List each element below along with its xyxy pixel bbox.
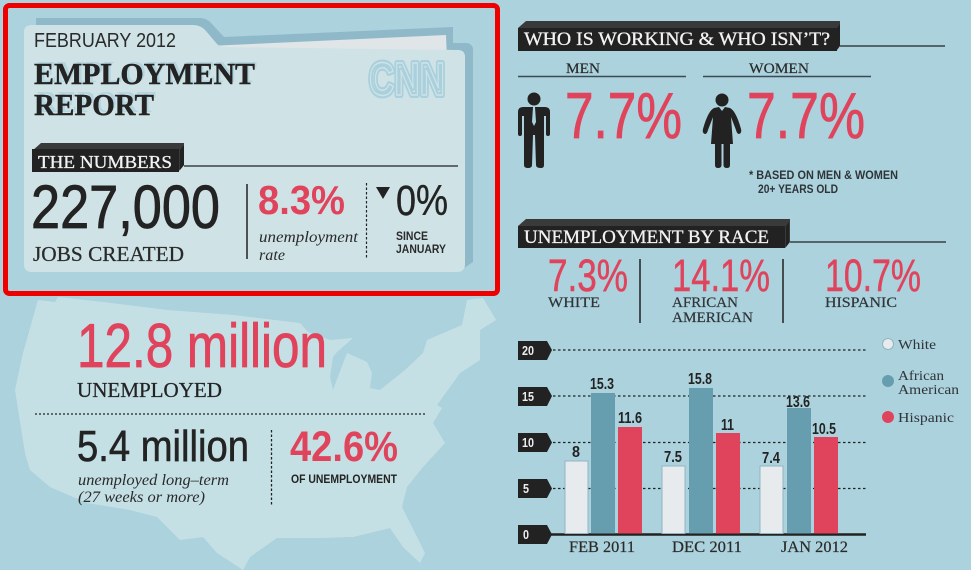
legend item: african american: African xyxy=(898,369,944,384)
since january xyxy=(396,231,446,256)
legend item: hispanic: Hispanic xyxy=(898,411,954,426)
since january: SINCE xyxy=(396,231,428,243)
icon: down triangle xyxy=(376,187,390,199)
long-term label xyxy=(78,472,229,506)
stat: hispanic: 10.7% xyxy=(825,250,921,301)
y axis values: 10 xyxy=(522,436,534,450)
y axis tags xyxy=(518,341,552,544)
folder front xyxy=(24,25,465,272)
long-term label: unemployed long–term xyxy=(78,472,229,489)
column label: women: WOMEN xyxy=(749,61,809,77)
title: EMPLOYMENT xyxy=(34,56,255,91)
category labels: FEB 2011 xyxy=(569,539,635,556)
footnote: 20+ YEARS OLD xyxy=(758,182,838,196)
date: FEBRUARY 2012 xyxy=(34,30,176,52)
paper sheet xyxy=(208,35,447,60)
stat: hispanic: HISPANIC xyxy=(825,295,897,311)
stat: white: WHITE xyxy=(548,295,600,311)
figure: 12.8 million: 12.8 million xyxy=(77,312,327,381)
bar values xyxy=(572,371,836,467)
panel: unemployed totals xyxy=(35,312,427,506)
unemployment rate label xyxy=(259,229,359,264)
stat: white: 7.3% xyxy=(548,250,628,301)
bar chart xyxy=(518,341,866,556)
title xyxy=(34,56,255,122)
heading: unemployment by race xyxy=(518,219,946,248)
logo: CNN: CNN xyxy=(369,53,445,105)
bar values: 7.5 xyxy=(664,449,682,466)
legend item: white: White xyxy=(898,338,936,353)
bar values: 8 xyxy=(572,444,580,461)
highlight border xyxy=(6,6,498,294)
y axis values: 0 xyxy=(523,528,529,542)
jobs figure: 227,000 xyxy=(31,173,220,241)
figure: men rate: 7.7% xyxy=(565,79,682,152)
stat: white xyxy=(548,250,628,311)
figure: women rate: 7.7% xyxy=(747,79,865,152)
icon: man xyxy=(518,92,550,168)
US map silhouette xyxy=(15,297,496,570)
bars: dec 2011 xyxy=(662,388,740,534)
since january: JANUARY xyxy=(396,244,446,256)
panel: unemployment by race xyxy=(518,219,946,326)
bar values: 15.8 xyxy=(688,371,712,388)
title shadow xyxy=(37,54,257,119)
bar values: 15.3 xyxy=(590,376,614,393)
logo: CNN: CNN xyxy=(369,53,445,105)
legend item: african american: American xyxy=(898,383,959,398)
heading: unemployment by race: UNEMPLOYMENT BY RACE xyxy=(524,227,769,248)
stat: african american: 14.1% xyxy=(672,250,770,301)
category labels xyxy=(569,539,848,556)
legend xyxy=(882,338,959,426)
bar values: 10.5 xyxy=(812,421,836,438)
heading: who is working: WHO IS WORKING & WHO ISN’T? xyxy=(524,29,830,50)
heading: the numbers xyxy=(32,143,458,172)
stat: african american: AMERICAN xyxy=(672,310,753,326)
unemployment rate figure: 8.3% xyxy=(258,177,345,223)
y axis values xyxy=(522,344,534,542)
footnote xyxy=(749,168,898,196)
footnote: * BASED ON MEN & WOMEN xyxy=(749,168,898,182)
icon: woman xyxy=(703,94,741,168)
long-term label: (27 weeks or more) xyxy=(78,489,205,506)
bars: feb 2011 xyxy=(565,393,642,534)
category labels: DEC 2011 xyxy=(672,539,742,556)
folder back xyxy=(36,18,473,268)
bar values: 11.6 xyxy=(618,410,642,427)
column label: men: MEN xyxy=(566,61,600,77)
label: of unemployment: OF UNEMPLOYMENT xyxy=(291,472,398,486)
change figure: 0% xyxy=(396,177,448,225)
stat: hispanic xyxy=(825,250,921,311)
heading: who is working xyxy=(518,21,945,51)
legend item: african american xyxy=(882,369,959,398)
jobs label: JOBS CREATED xyxy=(33,242,184,266)
label: unemployed: UNEMPLOYED xyxy=(77,378,222,402)
y axis values: 5 xyxy=(523,482,529,496)
stat: african american: AFRICAN xyxy=(672,295,738,311)
bars: jan 2012 xyxy=(760,408,838,534)
unemployment rate label: rate xyxy=(259,247,285,264)
bar values: 11 xyxy=(721,417,734,434)
title shadow: REPORT xyxy=(37,84,156,119)
y axis values: 15 xyxy=(522,390,534,404)
figure: 42.6%: 42.6% xyxy=(290,423,398,471)
panel: employment report folder xyxy=(24,18,473,272)
title: REPORT xyxy=(34,87,154,122)
category labels: JAN 2012 xyxy=(781,539,848,556)
bar values: 13.6 xyxy=(786,394,810,411)
figure: 5.4 million: 5.4 million xyxy=(77,422,249,471)
unemployment rate label: unemployment xyxy=(259,229,359,246)
title shadow: EMPLOYMENT xyxy=(37,54,257,89)
panel: who is working xyxy=(518,21,945,196)
y axis values: 20 xyxy=(522,344,534,358)
bar values: 7.4 xyxy=(762,450,780,467)
heading: the numbers: THE NUMBERS xyxy=(38,152,172,172)
stat: african american xyxy=(672,250,770,326)
